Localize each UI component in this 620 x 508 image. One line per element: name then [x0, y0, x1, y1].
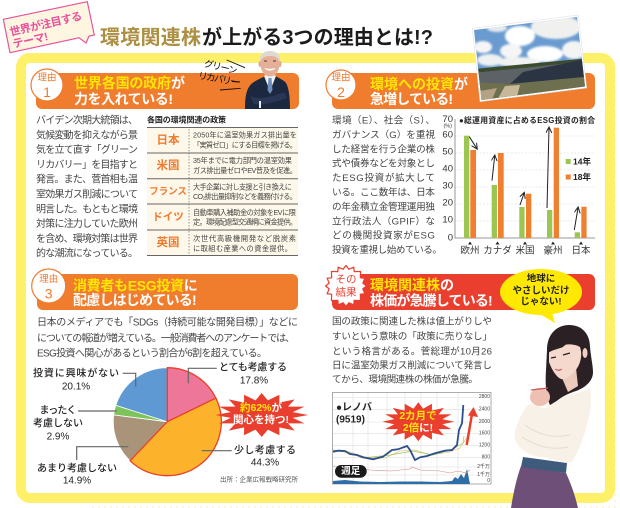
label: not much	[37, 462, 117, 486]
row: UK	[156, 234, 296, 253]
text block: result: 国の政策に関連した株は値上がりしや	[332, 316, 492, 328]
bar chart: ESG investment share	[442, 114, 595, 256]
header bar: reason 1	[31, 69, 299, 109]
legend: 18年	[573, 172, 591, 182]
text block: result	[332, 316, 492, 386]
row: Japan: 日本	[156, 133, 180, 147]
text block: reason 2	[332, 114, 442, 256]
label: no interest in investing: 20.1%	[62, 382, 90, 392]
photo: solar panels	[470, 14, 590, 104]
y axis labels: 50	[442, 146, 453, 158]
illustration: woman presenter	[511, 325, 593, 508]
label: no interest in investing	[33, 366, 119, 392]
label: not much: 14.9%	[63, 476, 91, 486]
callout: green recovery	[197, 58, 245, 90]
text block: reason 2: ガバナンス（G）を重視	[332, 129, 435, 141]
panel: result	[326, 266, 595, 484]
speech bubble	[500, 269, 582, 323]
text block: reason 2: 投資を重視し始めている。	[332, 244, 442, 256]
ticker label: ●レノバ	[336, 402, 372, 414]
x axis ticks and labels: 米国	[515, 244, 535, 256]
text block: reason 1: 気を立て直す「グリーン	[36, 143, 138, 156]
y axis labels: 30	[442, 180, 453, 192]
icon: portrait of president	[245, 51, 290, 109]
title: 環境関連株	[100, 25, 201, 49]
row: Germany	[152, 208, 297, 226]
text block: reason 2: どの機関投資家がESG	[332, 230, 435, 242]
row: Germany: 自動車購入補助金の対象をEVに限	[193, 208, 296, 217]
header bar: reason 1: 1	[43, 84, 51, 100]
title: が上がる3つの理由とは!?	[202, 25, 433, 49]
speech bubble: やさしいだけ	[512, 286, 570, 296]
text block: result: すいという意味の「政策に売りなし」	[332, 330, 492, 342]
header bar: result	[326, 266, 595, 310]
y axis labels: 1千万	[477, 471, 490, 478]
moving averages	[333, 437, 467, 458]
y axis labels: 2400	[479, 407, 490, 413]
ticker label	[336, 402, 372, 426]
text block: reason 2: いる。ここ数年は、日本	[332, 186, 435, 198]
y axis labels	[442, 114, 453, 244]
x axis ticks and labels	[460, 242, 591, 256]
text block: reason 3: 日本のメディアでも「SDGs（持続可能な開発目標）」などに	[37, 316, 298, 328]
header bar: reason 2	[326, 70, 595, 109]
text block: reason 1: 発言。また、菅首相も温	[36, 173, 138, 186]
callout burst: doubled in 2 months	[382, 402, 454, 441]
table: policies by country: 各国の環境関連の政策	[147, 114, 226, 124]
volume	[333, 469, 470, 484]
y axis labels: 2千万	[477, 463, 490, 470]
text block: reason 2: した経営を行う企業の株	[332, 143, 435, 155]
legend	[566, 156, 591, 182]
row: France	[149, 182, 297, 201]
row: Germany: ドイツ	[152, 211, 184, 223]
speech bubble: じゃない!	[520, 296, 562, 308]
legend: 14年	[573, 156, 591, 166]
bars: 2014	[464, 136, 580, 238]
label: very much consider: とても考慮する	[219, 360, 287, 374]
header bar: reason 3	[32, 269, 298, 310]
row: USA: 米国	[156, 158, 180, 172]
text block: result: 日に温室効果ガス削減について発言し	[332, 360, 492, 372]
row: France: CO₂排出量抑制などを義務付ける。	[193, 192, 297, 201]
text block: reason 1: 対策に注力していた欧州	[36, 217, 138, 230]
header bar: reason 3: 配慮しはじめている!	[73, 292, 197, 308]
header bar: reason 2: 環境への投資が	[370, 76, 468, 92]
header bar: reason 3: 理由	[39, 273, 58, 285]
label: very much consider	[219, 360, 287, 386]
tag: world attention theme: 世界が注目する	[8, 9, 83, 39]
header bar: reason 1: 世界各国の政府が	[74, 75, 185, 91]
header bar: result: 結果	[336, 286, 357, 298]
label: somewhat consider	[234, 444, 296, 468]
text block: reason 3: ESG投資へ関心があるという割合が6割を超えている。	[37, 346, 267, 360]
text block: result: という格言がある。菅総理が10月26	[332, 346, 492, 358]
y axis labels: 0	[487, 478, 490, 484]
y axis labels: 800	[482, 455, 490, 461]
y axis labels	[477, 394, 490, 484]
header bar: result: その	[336, 274, 356, 286]
row: Japan	[156, 130, 297, 150]
x axis ticks and labels: カナダ	[483, 244, 512, 256]
title	[100, 25, 433, 49]
callout burst: doubled in 2 months: 2カ月で	[399, 410, 437, 422]
row: Japan: 2050年に温室効果ガス排出量を	[193, 130, 297, 140]
row: UK: に取組む産業への資金提供。	[193, 244, 292, 253]
text block: reason 1	[36, 114, 138, 260]
row: France: フランス	[149, 186, 187, 198]
label: somewhat consider: 44.3%	[251, 458, 279, 468]
y axis labels: 2000	[479, 419, 490, 425]
chart title: ●総運用資産に占めるESG投資の割合	[459, 115, 595, 125]
text block: reason 1: を含め、環境対策は世界	[36, 232, 138, 245]
header bar: reason 2: 急増している!	[370, 91, 453, 107]
x axis ticks and labels: 日本	[571, 244, 591, 256]
header bar: reason 2: 理由	[331, 72, 351, 84]
x axis ticks and labels: 欧州	[460, 244, 480, 256]
pie chart: consumer ESG interest	[33, 360, 308, 486]
row: France: 大手企業に対し支援と引き換えに	[193, 182, 292, 192]
tag: world attention theme: テーマ!	[11, 30, 49, 51]
volume ratio line	[333, 466, 470, 473]
text block: reason 1: リカバリー」を目指すと	[36, 158, 138, 171]
y axis labels: (%)	[443, 124, 452, 130]
row: UK: 次世代高級機開発など脱炭素	[193, 234, 296, 243]
panel: reason 2	[326, 14, 595, 256]
x axis ticks and labels: 豪州	[543, 244, 563, 256]
row: USA: ガス排出量ゼロやEV普及を促進。	[193, 166, 297, 175]
text block: reason 2: の年金積立金管理運用独	[332, 201, 435, 213]
text block: reason 1: 気候変動を抑えながら景	[36, 128, 138, 141]
y axis labels: 40	[442, 164, 453, 174]
header bar: reason 3: 消費者もESG投資に	[73, 278, 198, 294]
callout burst: 62 percent: 約62%が	[240, 401, 283, 414]
price line	[333, 405, 463, 460]
callout: green recovery: リカバリー	[197, 71, 240, 89]
y axis labels: 1600	[479, 431, 490, 437]
header bar: result: 環境関連株の	[370, 277, 454, 293]
label: no interest in investing: 投資に興味がない	[33, 366, 119, 380]
label: not at all: まったく	[40, 404, 76, 416]
weekly pill: 週足	[341, 466, 361, 477]
red arrow head	[468, 407, 478, 417]
header bar: reason 2: 2	[337, 84, 345, 100]
leader lines	[77, 368, 232, 460]
text block: reason 1: 的な潮流になっている。	[36, 247, 138, 260]
y axis labels: 1200	[479, 443, 490, 449]
text block: reason 1: 室効果ガス削減について	[36, 188, 138, 200]
y axis labels: 2800	[479, 394, 490, 400]
text block: reason 1: 明言した。もともと環境	[36, 203, 138, 215]
text block: reason 2: 式や債券などを対象とし	[332, 158, 435, 170]
y axis labels: 10	[442, 214, 453, 226]
header bar: reason 1: 理由	[37, 72, 57, 84]
source note: 出所：企業広報戦略研究所	[220, 474, 298, 484]
bars: 2018	[470, 128, 587, 238]
header bar: result: 株価が急騰している!	[370, 293, 493, 309]
y axis labels: 0	[448, 232, 453, 244]
speech bubble: 地球に	[527, 272, 555, 284]
row: USA	[156, 156, 297, 175]
callout burst: doubled in 2 months: 2倍に!	[403, 421, 433, 434]
y axis labels: 70	[442, 114, 453, 125]
header bar: reason 1: 力を入れている!	[74, 91, 173, 107]
text block: reason 2: たESG投資が拡大して	[332, 172, 435, 184]
text block: result: てから、環境関連株の株価が急騰。	[332, 374, 478, 386]
callout burst: 62 percent	[215, 393, 308, 437]
table: policies by country	[147, 114, 298, 256]
text block: reason 2: 環境（E）、社会（S）、	[332, 114, 435, 126]
callout: green recovery: グリーン	[203, 58, 239, 77]
label: very much consider: 17.8%	[240, 376, 268, 386]
row: Japan: 「実質ゼロ」にする目標を掲げる。	[193, 140, 297, 150]
stock chart: Renova	[332, 392, 491, 484]
trend arrows	[469, 128, 578, 230]
text block: reason 2: 立行政法人（GPIF）な	[332, 215, 435, 227]
y axis labels: 20	[442, 198, 453, 208]
ticker label: (9519)	[336, 414, 365, 426]
row: Germany: 定。環境配慮型交通網に資金提供。	[193, 218, 297, 226]
row: USA: 35年までに電力部門の温室効果	[193, 156, 292, 165]
weekly pill	[335, 465, 367, 478]
tag: world attention theme	[3, 2, 94, 53]
panel: reason 1	[31, 51, 299, 260]
red arrow	[467, 414, 472, 445]
label: not at all: 2.9%	[47, 432, 70, 442]
label: not at all	[33, 404, 83, 442]
header bar: reason 3: 3	[45, 286, 53, 302]
callout burst: 62 percent: 関心を持つ!	[233, 413, 289, 426]
row: UK: 英国	[156, 235, 180, 249]
text block: reason 1: バイデン次期大統領は、	[36, 114, 138, 126]
label: not at all: 考慮しない	[33, 416, 83, 430]
label: somewhat consider: 少し考慮する	[234, 444, 296, 456]
panel: reason 3	[32, 269, 308, 486]
text block: reason 3: についての報道が増えている。一般消費者へのアンケートでは、	[37, 332, 295, 344]
text block: reason 3	[37, 316, 298, 360]
label: not much: あまり考慮しない	[37, 462, 117, 474]
y axis labels: 60	[442, 130, 453, 140]
